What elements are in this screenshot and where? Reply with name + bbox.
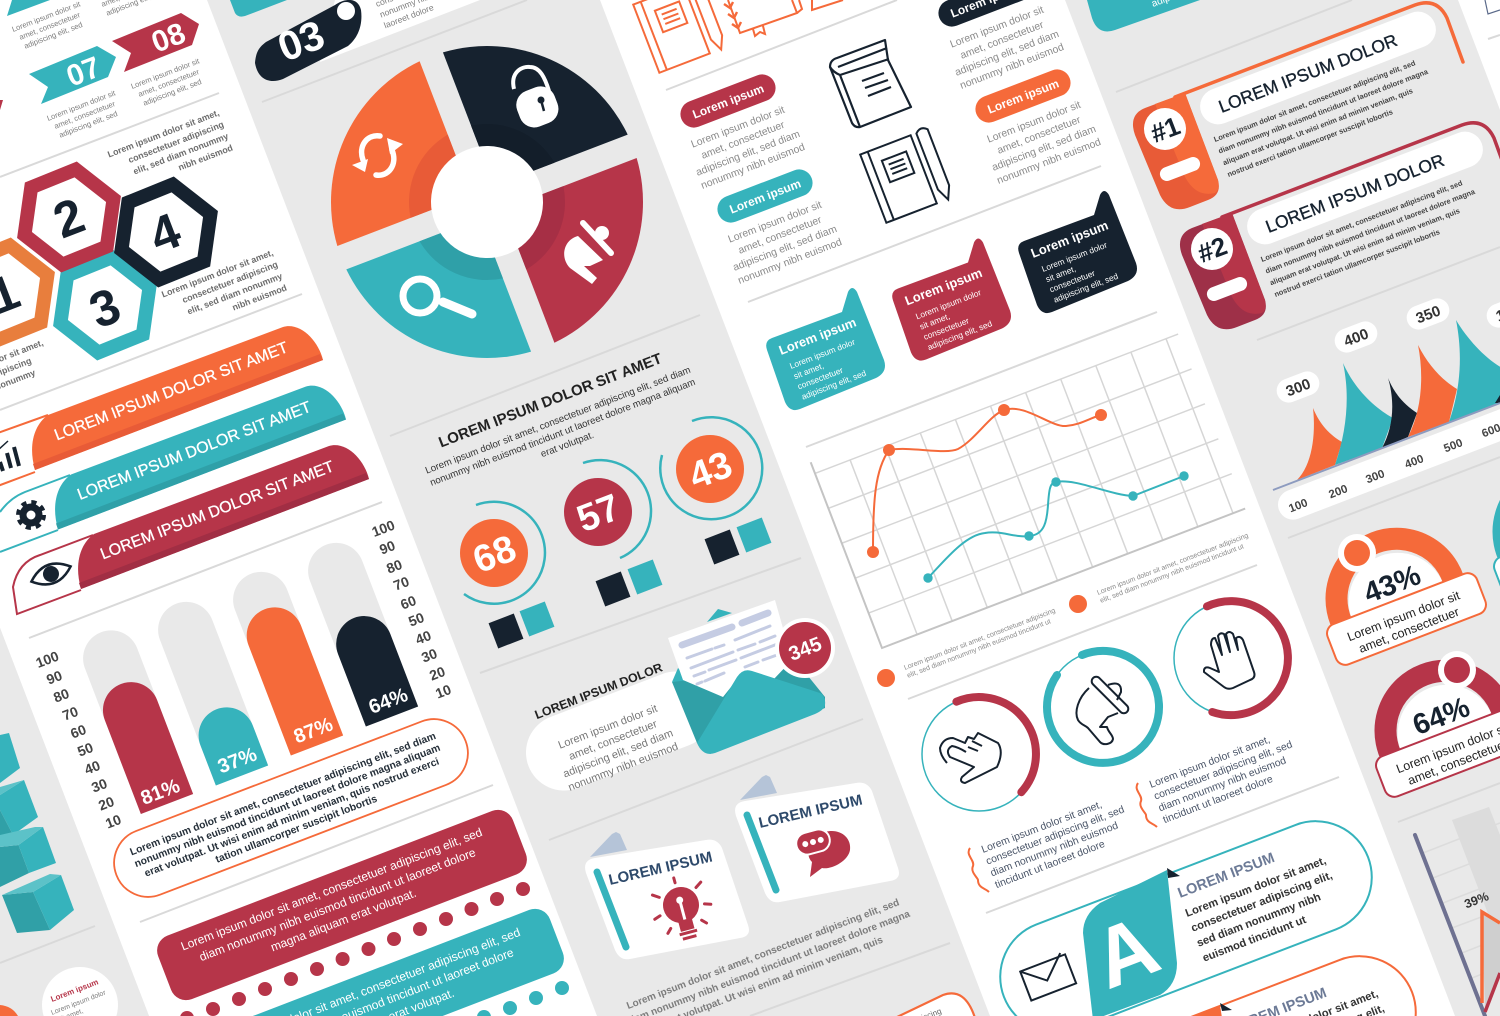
legend item 2: elit, sed diam nonummy nibh euismod tincidunt ut [1099,543,1245,605]
callout text: tation ullamcorper suscipit lobortis [214,794,379,866]
text teal block: nonummy nibh euismod [737,237,844,287]
tab A: A [1080,897,1171,1007]
card A title: LOREM IPSUM [1176,850,1277,902]
lower chart: 39% [1462,889,1491,911]
crimson box text: Lorem ipsum dolor sit amet, consectetuer adipiscing elit, sed [179,825,484,953]
speech bubble teal: Lorem ipsum [777,315,858,358]
left axis: 50 [75,739,96,760]
banner orange [0,326,323,487]
gauge 64 percent [1368,651,1500,800]
bar chart [33,517,454,832]
left axis: 80 [51,685,72,706]
text under 08: adipiscing elit, sed [142,77,203,108]
right axis: 100 [369,517,397,540]
text navy block: adipiscing elit, sed diam [954,29,1061,79]
crimson banner outline [13,535,93,614]
text orange block: amet, consectetuer [996,115,1083,157]
axis pill: 100 [1287,497,1310,515]
callout text: erat volutpat. Ut wisi enim ad minim veniam, quis nostrud exerci [143,756,441,880]
speech bubble crimson: adipiscing elit, sed [926,318,994,352]
orange series [867,404,1107,558]
panel #1: #1 [1146,110,1184,149]
panel #2 [1180,123,1500,329]
icon: mail [1019,952,1076,1001]
bar values [138,684,411,810]
teal dots [477,981,569,1016]
value pills: 300 [1284,376,1313,400]
ribbon 07 [29,46,116,104]
banner teal [55,386,346,530]
text right of hexagons: elit, sed diam nonummy [186,271,284,316]
banner crimson: LOREM IPSUM DOLOR SIT AMET [98,458,337,563]
pill orange [971,65,1075,127]
squares 43 [705,518,771,564]
caption right: diam nonummy nibh euismod [1157,755,1288,814]
icon: bell [564,223,611,284]
pill text: adipiscing elit, sed diam [562,727,675,780]
heading: LOREM IPSUM DOLOR SIT AMET [436,350,664,451]
lower chart [1415,807,1500,1016]
hexagon numbers: 2 [46,187,92,249]
icon: padlock [512,67,563,132]
banner crimson [78,445,369,589]
legend item 2 [1069,532,1253,613]
banner orange: LOREM IPSUM DOLOR SIT AMET [52,339,291,444]
speech bubble crimson: Lorem ipsum dolor [914,287,983,321]
left axis: 20 [96,793,117,814]
icon: sync [352,136,403,175]
icon: hand [1204,632,1254,689]
text under 07: adipiscing elit, sed [58,109,119,140]
tag 03: 03 [271,11,331,71]
ribbon 07: 07 [62,51,105,94]
panel #2: LOREM IPSUM DOLOR [1263,150,1447,237]
orange card fragment [895,993,975,1016]
text under 07: Lorem ipsum dolor sit [46,88,117,123]
pill navy [934,0,1038,31]
hexagon numbers: 3 [82,277,128,339]
teal text box [189,904,569,1016]
caption right [1137,728,1303,827]
legend item 2: Lorem ipsum dolor sit amet, consectetuer adipiscing [1096,532,1250,597]
icon: orange book [724,0,843,36]
caption left: diam nonummy nibh euismod [989,820,1120,879]
text block top left: adipiscing elit, sed [23,20,84,51]
card A text: euismod tincidunt ut [1201,914,1308,965]
mountain chart [1273,320,1500,490]
left axis: 40 [82,757,103,778]
icon: envelope with letter [668,600,825,754]
right axis [369,517,454,702]
right axis: 30 [419,645,440,666]
caption left [969,793,1135,892]
panel #1: diam nonummy nibh euismod tincidunt ut laoreet dolore magna [1217,67,1430,156]
right axis: 60 [398,592,419,613]
crimson dots [180,882,530,1016]
white bubble bottom left [42,967,118,1016]
crimson box text: magna aliquam erat volutpat. [269,886,418,954]
text crimson block: nonummy nibh euismod [700,142,807,192]
gauge 43 percent: Lorem ipsum dolor sit [1345,588,1462,644]
speech bubble teal: consectetuer [796,365,845,391]
text block top left: Lorem ipsum dolor sit [11,0,82,34]
hexagon numbers: 4 [142,202,188,264]
ring open hand [1174,601,1288,715]
gauge 43 percent: 43% [1360,559,1425,610]
axis pill [1274,388,1500,524]
speech bubble crimson [892,238,1011,361]
callout text: Lorem ipsum dolor sit amet, consectetuer adipiscing elit, sed diam [129,731,438,858]
paragraph bottom: Lorem ipsum dolor sit amet, consectetuer adipiscing elit, sed [625,897,901,1012]
pie chart [286,1,688,403]
caption right: consectetuer adipiscing elit, sed [1153,739,1294,803]
panel #1: Lorem ipsum dolor sit amet, consectetuer adipiscing elit, sed [1212,58,1417,144]
text block top left: amet, consectetuer [18,10,82,42]
tab B [1187,1003,1232,1016]
panel #1: aliquam erat volutpat. Ut wisi enim ad minim veniam, quis [1221,86,1414,167]
caption left: Lorem ipsum dolor sit amet, [980,800,1104,856]
right axis: 40 [413,627,434,648]
caption right: Lorem ipsum dolor sit amet, [1148,735,1272,791]
speech bubble crimson: sit amet, [918,311,951,332]
text under 08: amet, consectetuer [137,67,201,99]
text right aligned above hexagons: consectetuer adipiscing [127,119,225,165]
badge 345 [775,618,835,678]
icon: notebook [859,126,954,223]
card lightbulb [585,832,749,959]
icon: eye [28,558,74,590]
ribbon 08: 08 [147,17,190,60]
text teal block: amet, consectetuer [737,215,824,257]
pill text: Lorem ipsum dolor sit [557,703,659,752]
speech bubble navy [1018,191,1137,313]
pill teal: Lorem ipsum [727,176,803,217]
text orange block: Lorem ipsum dolor sit [986,100,1083,146]
isometric cubes [0,733,74,933]
caption left: consectetuer adipiscing elit, sed [985,804,1126,868]
text under 07: amet, consectetuer [53,99,117,131]
text right aligned above hexagons: elit, sed diam nonummy [132,131,230,176]
squares 57 [596,560,662,606]
speech bubble navy: consectetuer [1048,268,1097,294]
axis pill: 500 [1442,437,1465,455]
speech bubble teal: Lorem ipsum dolor [788,337,857,371]
text right of hexagons: Lorem ipsum dolor sit amet, [160,248,275,299]
bar values: 37% [215,743,260,778]
white bubble bottom left: Lorem ipsum [49,977,100,1004]
ring bell [1047,651,1159,763]
panel #2: #2 [1193,230,1231,269]
value pills [1273,293,1500,406]
text navy block: amet, consectetuer [959,20,1046,62]
stat 68: 68 [467,528,522,582]
callout text: nonummy nibh euismod tincidunt ut laoreet dolore magna aliquam [133,743,442,870]
panel #2: aliquam erat volutpat. Ut wisi enim ad minim veniam, quis [1268,206,1461,287]
left axis [33,648,124,832]
stat 57: 57 [571,487,626,541]
hexagon numbers [0,187,188,339]
icon: gear [18,502,44,528]
gauge 64 percent: 64% [1409,691,1474,742]
crimson text box [152,805,532,1005]
legend item 1: elit, sed diam nonummy nibh euismod tincidunt ut [906,618,1052,680]
value pills: 400 [1342,326,1371,350]
grid [811,323,1245,648]
card A text: sed diam nonummy nibh [1195,891,1323,950]
stat 43: 43 [683,444,738,498]
card chat [735,775,899,902]
crimson box text: diam nonummy nibh euismod tincidunt ut laoreet dolore [197,845,478,964]
hexagon 2 [13,155,125,279]
right axis: 10 [433,681,454,702]
icon: magnifier [403,279,472,314]
bar values: 81% [138,775,183,810]
tag 03 [255,0,361,81]
pill crimson [676,70,780,132]
ring pointer [922,697,1036,811]
text orange block: adipiscing elit, sed diam [991,124,1098,174]
right axis: 20 [427,663,448,684]
speech bubble navy: adipiscing elit, sed [1052,271,1120,305]
teal series [923,471,1189,583]
banner teal: LOREM IPSUM DOLOR SIT AMET [75,399,314,504]
intro text: erat volutpat. [539,430,596,460]
ribbon fragments top left [0,0,50,110]
teal banner outline [0,475,70,552]
ribbon 08 [112,13,199,72]
axis pill: 400 [1403,453,1426,471]
pill text: amet, consectetuer [567,718,659,763]
pill teal [713,165,817,227]
speech bubble teal: adipiscing elit, sed [800,368,868,402]
line chart [811,323,1245,648]
intro text: Lorem ipsum dolor sit amet, consectetuer adipiscing elit, sed diam [424,365,692,477]
text under 08: Lorem ipsum dolor sit [130,56,201,91]
teal fragment top [230,0,287,17]
card A outline [984,805,1388,1016]
card chat: LOREM IPSUM [757,792,864,832]
caption left: tincidunt ut laoreet dolore [994,839,1107,891]
pill orange: Lorem ipsum [985,76,1061,117]
text crimson block: Lorem ipsum dolor sit [690,105,787,151]
speech bubble crimson: consectetuer [922,315,971,342]
hexagon 1 [0,231,59,355]
card A text: consectetuer adipiscing elit, [1190,870,1334,935]
text right of hexagons: consectetuer adipiscing [181,259,279,305]
gauge teal fragment [1486,454,1500,601]
stat 43 [660,417,762,519]
left axis: 100 [33,648,61,671]
text orange block: nonummy nibh euismod [996,137,1103,187]
panel #1: LOREM IPSUM DOLOR [1216,30,1400,117]
white text pill [515,660,725,802]
tab A [1080,868,1180,1016]
speech bubble crimson: Lorem ipsum [903,265,984,308]
hexagon 4 [110,170,222,294]
legend item 1: Lorem ipsum dolor sit amet, consectetuer adipiscing [903,607,1057,672]
icon: bar chart [0,441,19,471]
bar 87 percent [225,564,343,756]
gauge 43 percent [1319,521,1489,668]
bar 64 percent [300,535,418,727]
bar values: 64% [366,684,411,719]
callout pill [104,709,478,907]
heading lorem ipsum dolor: LOREM IPSUM DOLOR [533,660,664,722]
card lightbulb: LOREM IPSUM [607,849,714,889]
teal fragment right [1087,0,1200,32]
card A text: Lorem ipsum dolor sit amet, [1184,855,1328,920]
text right of tag 03: laoreet dolore [382,2,435,30]
legend item 1 [877,607,1060,687]
caption right: tincidunt ut laoreet dolore [1162,774,1275,826]
right axis: 80 [384,556,405,577]
axis pill: 200 [1327,483,1350,501]
squares 68 [489,602,554,648]
stat 68 [460,502,545,604]
stat 57 [564,460,651,558]
text right aligned above hexagons: Lorem ipsum dolor sit amet, [106,108,221,159]
speech bubble navy: Lorem ipsum [1029,218,1110,261]
intro text: nonummy nibh euismod tincidunt ut laoreet dolore magna aliquam [429,377,697,489]
badge 345: 345 [786,633,825,666]
bar 37 percent [150,594,268,786]
card B outline [1028,940,1432,1016]
text teal block: adipiscing elit, sed diam [732,224,839,274]
orange fragment bottom left [0,1005,18,1016]
text navy block: nonummy nibh euismod [959,42,1066,92]
right axis: 70 [391,573,412,594]
speech bubble navy: sit amet, [1044,263,1077,284]
icon: bell outline [1076,675,1130,744]
hexagon 3 [49,243,161,367]
icon: pointing hand [940,733,1001,783]
panel #2: Lorem ipsum dolor sit amet, consectetuer adipiscing elit, sed [1259,178,1464,264]
panel #2: diam nonummy nibh euismod tincidunt ut laoreet dolore magna [1264,187,1477,276]
left axis: 70 [60,703,81,724]
text crimson block: adipiscing elit, sed diam [695,129,802,179]
speech bubble teal [766,288,885,410]
left axis: 90 [44,667,65,688]
text crimson block: amet, consectetuer [700,120,787,162]
gauge 43 percent: amet, consectetuer [1357,605,1461,656]
text teal block: Lorem ipsum dolor sit [727,200,824,246]
orange line icons [632,0,843,73]
icon: orange notebook [632,0,727,73]
panel #1 [1133,3,1463,209]
speech bubble navy: Lorem ipsum dolor [1040,240,1109,274]
bar 81 percent [75,622,193,814]
top right line icon fragment [1485,0,1500,14]
speech bubble teal: sit amet, [792,360,825,381]
pill crimson: Lorem ipsum [690,81,766,122]
panel #2: nostrud exerci tation ullamcorper suscipit lobortis [1273,227,1441,299]
icon: book [830,40,911,127]
left axis: 30 [89,775,110,796]
axis pill: 300 [1364,468,1387,486]
text right aligned above hexagons: nibh euismod [177,143,234,173]
text right of hexagons: nibh euismod [231,283,288,313]
pill text: nonummy nibh euismod [567,741,680,794]
value pills: 350 [1414,303,1443,327]
left axis: 60 [68,721,89,742]
panel #1: nostrud exerci tation ullamcorper suscipit lobortis [1226,107,1394,179]
left axis: 10 [103,811,124,832]
bar values: 87% [291,713,336,748]
right axis: 50 [406,609,427,630]
right axis: 90 [377,537,398,558]
text navy block: Lorem ipsum dolor sit [949,5,1046,51]
